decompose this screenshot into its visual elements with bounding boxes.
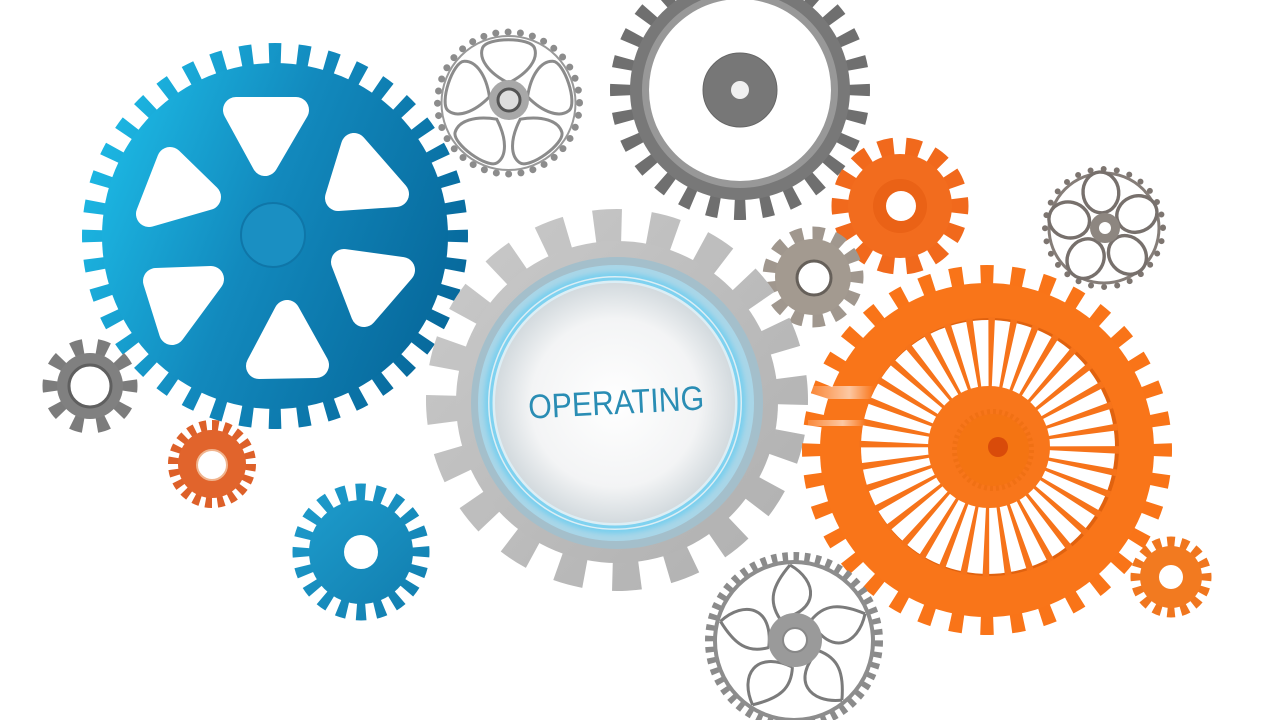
hub dot [988, 437, 1008, 457]
star petals [715, 565, 871, 715]
white centre opening [649, 0, 831, 181]
filigree lobes [440, 40, 577, 170]
hub inner gear [955, 412, 1031, 488]
filigree lobes right [1040, 167, 1168, 289]
glowing centre disc [495, 283, 735, 523]
gear: filigree bottom [710, 557, 878, 720]
orange hub [928, 386, 1050, 508]
gear: tiny orange right [1136, 542, 1206, 612]
gear: small orange upper [841, 147, 959, 265]
filigree hub right [1090, 213, 1120, 243]
gear: filigree right [1040, 167, 1168, 289]
blue gear windows [149, 110, 402, 366]
gear: large orange [808, 275, 1162, 625]
orange spokes [894, 352, 1084, 542]
blue gear hub [241, 203, 305, 267]
star hub [768, 613, 822, 667]
gear: dark grey top [621, 0, 859, 209]
gear: small orange left [174, 426, 250, 502]
gear: central operating gear [434, 217, 800, 583]
light streaks [812, 386, 874, 399]
gear: large blue [94, 55, 456, 417]
label: OPERATING: OPERATING [527, 379, 705, 427]
gear: small grey left [50, 346, 130, 426]
filigree hub [489, 80, 529, 120]
gear: small blue bottom [302, 493, 420, 611]
orange window [861, 318, 1119, 576]
gear: small filigree top [438, 32, 580, 174]
grey gear hub [703, 53, 777, 127]
recessed blue ring [471, 257, 763, 549]
gear: beige small [770, 234, 856, 320]
